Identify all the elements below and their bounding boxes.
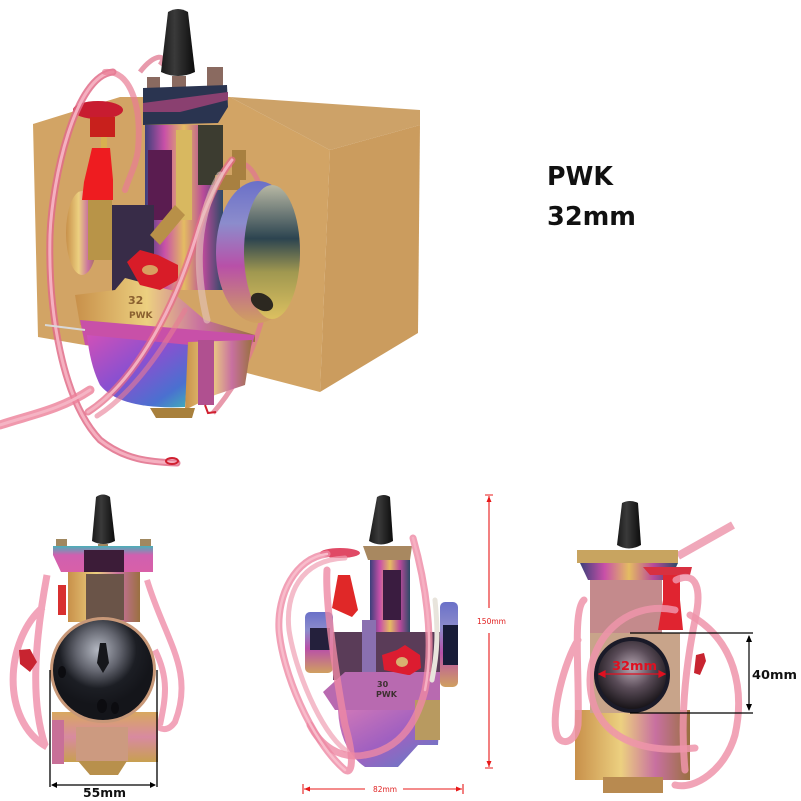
side view carburetor xyxy=(279,495,506,794)
32mm label: 32mm xyxy=(612,658,657,673)
red screw xyxy=(19,649,37,672)
rear red knob xyxy=(643,567,692,575)
front view carburetor xyxy=(13,494,182,800)
pipe down right xyxy=(198,340,214,405)
40mm arrows xyxy=(746,635,752,711)
bottom nut xyxy=(150,408,195,418)
middle pipe xyxy=(112,205,154,295)
embossed mark: 32 xyxy=(128,294,143,307)
150mm arrows xyxy=(486,496,492,767)
top plate xyxy=(143,85,228,125)
rear red slide xyxy=(658,575,683,630)
mid body xyxy=(333,632,440,680)
pink tubes xyxy=(0,72,232,463)
rear middle body xyxy=(590,633,680,713)
side tubes xyxy=(279,538,437,771)
rear bell hole xyxy=(598,641,666,709)
gold column shine xyxy=(176,130,192,220)
bowl gold right xyxy=(185,340,252,410)
heading: PWK xyxy=(547,162,614,192)
82mm dimension xyxy=(303,784,463,794)
front plate xyxy=(53,546,153,572)
82mm arrows xyxy=(304,786,462,792)
nut xyxy=(78,761,127,775)
body base xyxy=(75,278,255,342)
rear top plate xyxy=(577,550,678,563)
bell outer ring xyxy=(216,181,300,323)
side base xyxy=(323,672,440,710)
red tip xyxy=(205,405,216,413)
side mark: 30 xyxy=(377,680,389,689)
55mm label: 55mm xyxy=(83,786,126,800)
needle xyxy=(97,643,109,673)
red slide xyxy=(82,148,113,200)
embossed mark: PWK xyxy=(129,311,154,321)
red tube end xyxy=(166,458,178,464)
40mm label: 40mm xyxy=(752,667,797,682)
body column xyxy=(145,125,223,290)
mid pipe xyxy=(362,620,376,675)
150mm label: 150mm xyxy=(477,617,506,626)
small jets xyxy=(58,666,119,714)
side cap xyxy=(369,495,393,544)
spring xyxy=(150,205,185,245)
left side bell xyxy=(305,612,333,673)
side red slide xyxy=(332,575,358,617)
rear bottom xyxy=(603,777,663,793)
bell ring xyxy=(50,617,156,723)
right gold xyxy=(415,700,440,740)
red star knob xyxy=(127,250,178,290)
bowl centre xyxy=(76,727,128,761)
40mm dimension xyxy=(630,633,753,713)
side column xyxy=(370,560,410,640)
bowl flange xyxy=(80,320,255,350)
rear cap xyxy=(617,501,641,548)
red screw xyxy=(694,653,706,675)
bell throat xyxy=(244,185,300,319)
rear column xyxy=(590,580,662,635)
side knob centre xyxy=(396,657,408,667)
dark throat slot xyxy=(248,289,276,315)
side mark xyxy=(376,680,398,699)
black cap xyxy=(161,9,195,76)
heading xyxy=(547,162,636,232)
front lower body xyxy=(52,712,158,762)
side pipe xyxy=(52,720,64,764)
gold pin xyxy=(101,137,107,150)
dark column shade xyxy=(148,150,172,220)
82mm label: 82mm xyxy=(373,785,397,794)
pipe shine xyxy=(88,200,112,260)
column xyxy=(68,572,140,622)
55mm dimension lines xyxy=(50,670,157,787)
knob centre xyxy=(142,265,158,275)
clip xyxy=(45,325,85,330)
rear bell ring xyxy=(594,637,670,713)
cardboard box xyxy=(33,97,420,392)
55mm arrows xyxy=(51,782,156,788)
rear tubes xyxy=(555,577,739,786)
column dark xyxy=(383,570,401,620)
straight tube xyxy=(678,525,733,556)
rear view carburetor xyxy=(555,501,797,793)
main carburetor photo xyxy=(0,9,300,464)
side bowl xyxy=(338,710,440,767)
side red knob xyxy=(320,548,360,558)
plate highlight xyxy=(143,92,228,112)
side mark: PWK xyxy=(376,690,398,699)
heading: 32mm xyxy=(547,202,636,232)
right side bell xyxy=(440,602,458,687)
column inner xyxy=(86,574,124,620)
side star knob xyxy=(382,645,421,675)
black cap front xyxy=(92,494,115,544)
plate centre dark xyxy=(84,550,124,572)
150mm dimension xyxy=(485,495,493,768)
knob stem xyxy=(90,117,115,137)
32mm arrow xyxy=(599,671,665,677)
front screws xyxy=(56,539,151,549)
screws on top xyxy=(147,67,223,90)
embossed mark xyxy=(128,294,154,321)
throat stem xyxy=(215,150,246,190)
tube behind the body xyxy=(140,57,270,413)
bowl xyxy=(87,335,190,407)
bell dark xyxy=(310,628,330,650)
right column shade xyxy=(198,125,223,185)
bell hole xyxy=(53,620,153,720)
rear lower body xyxy=(575,710,690,780)
right bell dark xyxy=(443,625,458,665)
red slide side xyxy=(58,585,66,615)
red needle knob xyxy=(73,101,123,119)
side plate xyxy=(363,546,412,560)
tubes front xyxy=(13,575,182,747)
rear upper band xyxy=(580,563,678,580)
left bell xyxy=(66,191,98,275)
